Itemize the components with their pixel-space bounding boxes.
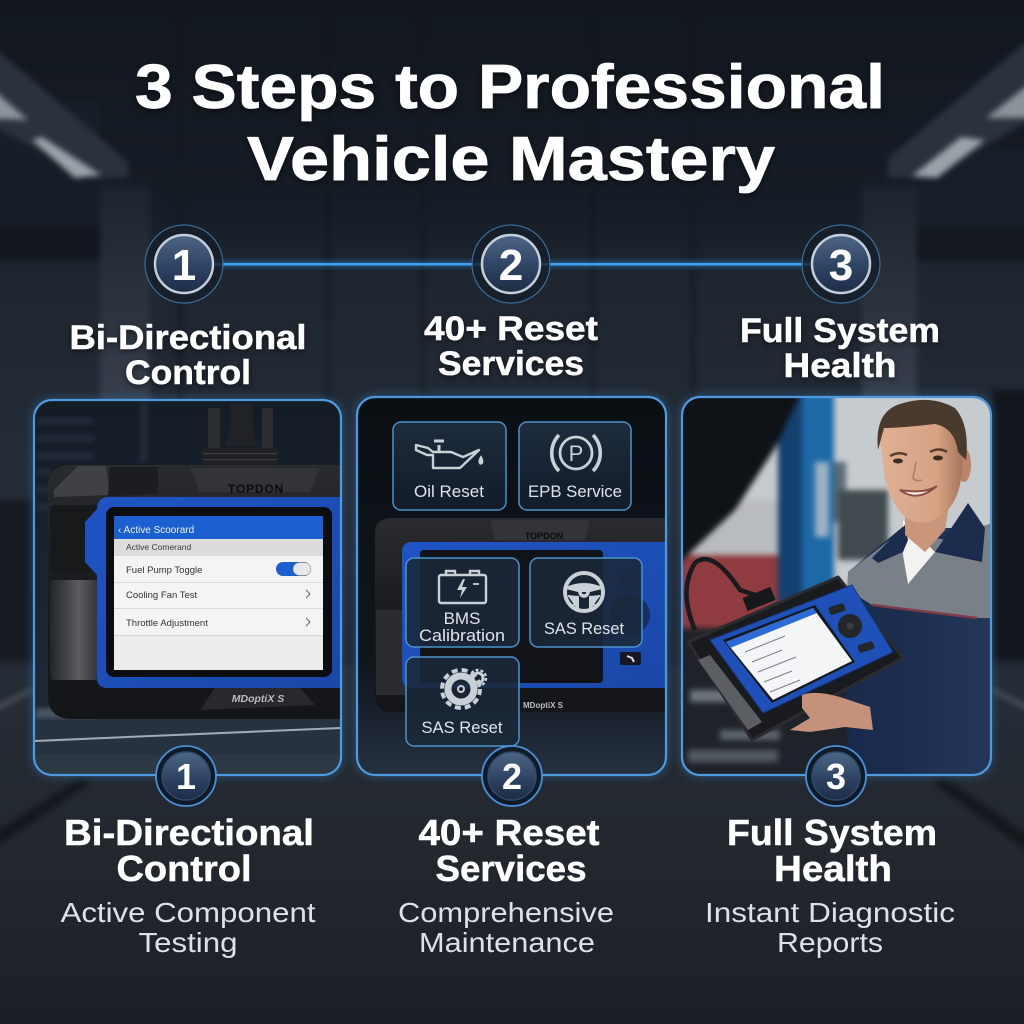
hand	[790, 693, 873, 732]
step heading 3 (top)	[740, 312, 940, 385]
device: rugged shell	[48, 465, 341, 719]
device: connector	[203, 404, 277, 460]
device behind tiles: TOPDON	[525, 531, 563, 541]
icon: battery	[439, 571, 486, 603]
step badge 3 (lower): 3	[826, 756, 846, 797]
title: 3 Steps to Professional	[135, 53, 885, 122]
device: model label: MDoptiX S	[232, 693, 284, 705]
icon: steering wheel	[565, 573, 603, 611]
icon: gears	[442, 670, 486, 708]
tile: EPB service	[519, 422, 631, 510]
step heading 2 (top): Services	[438, 345, 584, 383]
mechanic: head	[877, 400, 971, 552]
step badge 3 (top): 3	[829, 241, 853, 290]
caption 3: Health	[774, 848, 892, 889]
device: display UI: Cooling Fan Test	[126, 590, 197, 601]
device: display UI: ‹ Active Scoorard	[118, 525, 194, 536]
caption 2: 40+ Reset	[418, 812, 600, 853]
panel 3: full system health	[672, 385, 1000, 788]
tile: SAS reset (steering wheel): SAS Reset	[544, 619, 624, 638]
title	[135, 53, 885, 194]
tile: BMS calibration	[406, 558, 519, 647]
caption 2	[398, 812, 614, 958]
tile: SAS reset (gears): SAS Reset	[422, 718, 503, 737]
tile: oil reset: Oil Reset	[414, 482, 484, 501]
caption 1: Active Component	[60, 897, 316, 928]
step badge 2 (top)	[472, 225, 550, 303]
device: display UI: Active Comerand	[126, 542, 191, 552]
cable	[686, 559, 770, 630]
device: display UI: Fuel Pump Toggle	[126, 565, 202, 576]
caption 2: Maintenance	[419, 927, 595, 958]
icon: parking brake: P	[569, 441, 583, 466]
caption 3: Instant Diagnostic	[705, 897, 955, 928]
step badge 2 (top): 2	[499, 241, 523, 290]
step badge 2 (lower)	[482, 746, 542, 806]
tile: BMS calibration: BMS	[444, 609, 480, 628]
caption 3	[705, 812, 955, 958]
step heading 1 (top): Bi-Directional	[70, 319, 306, 357]
device: display UI: Throttle Adjustment	[126, 618, 208, 629]
device: blue frame	[85, 497, 345, 688]
step heading 2 (top): 40+ Reset	[424, 310, 598, 348]
tile: oil reset	[393, 422, 506, 510]
connector line between steps	[215, 260, 810, 268]
step badge 1 (top): 1	[172, 241, 196, 290]
step badge 2 (lower): 2	[502, 756, 522, 797]
step badge 1 (top)	[145, 225, 223, 303]
device: display UI	[114, 516, 323, 670]
title: Vehicle Mastery	[247, 125, 776, 194]
step badge 3 (lower)	[806, 746, 866, 806]
step heading 3 (top): Full System	[740, 312, 940, 350]
caption 1: Control	[116, 848, 252, 889]
device: rugged shell: TOPDON	[228, 482, 284, 496]
device behind tiles	[375, 518, 665, 712]
step badge 1 (lower)	[156, 746, 216, 806]
workshop backdrop	[683, 398, 990, 774]
tile: BMS calibration: Calibration	[419, 626, 505, 645]
icon: oil can	[416, 441, 483, 468]
caption 1: Testing	[138, 927, 238, 958]
step badge 1 (lower): 1	[176, 756, 196, 797]
step heading 1 (top): Control	[125, 354, 251, 392]
caption 3: Full System	[727, 812, 937, 853]
caption 2: Services	[436, 848, 586, 889]
mechanic: torso	[845, 503, 990, 774]
tile: EPB service: EPB Service	[528, 482, 622, 501]
caption 2: Comprehensive	[398, 897, 614, 928]
step heading 2 (top)	[424, 310, 598, 383]
device behind tiles: MDoptiX S	[523, 701, 564, 710]
step heading 3 (top): Health	[784, 347, 896, 385]
step badge 3 (top)	[802, 225, 880, 303]
tile: SAS reset (gears)	[406, 657, 519, 746]
handheld scanner	[688, 577, 903, 740]
caption 1	[60, 812, 316, 958]
panel 2: reset services	[357, 397, 666, 775]
caption 1: Bi-Directional	[64, 812, 314, 853]
step heading 1 (top)	[70, 319, 306, 392]
caption 3: Reports	[777, 927, 883, 958]
panel 1: bi-directional control	[34, 400, 345, 775]
tile: SAS reset (steering wheel)	[530, 558, 642, 647]
device: screen bezel	[106, 507, 332, 677]
